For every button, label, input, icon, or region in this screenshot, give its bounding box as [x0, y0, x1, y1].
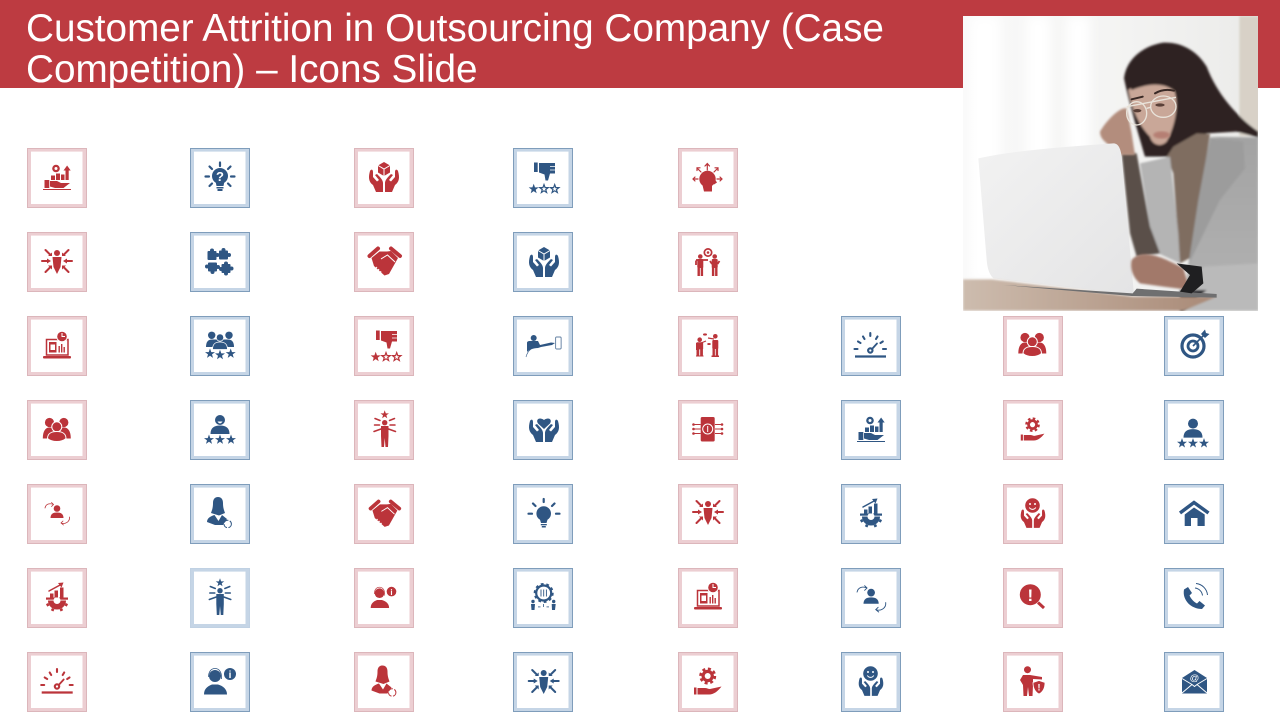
icon tile: handshake	[354, 232, 414, 292]
header bar with title	[0, 0, 1280, 88]
photo: woman working at a laptop	[963, 16, 1258, 311]
icon tile: phone call	[1164, 568, 1224, 628]
icon tile: gauge	[842, 316, 900, 376]
icon tile: growth in hand	[28, 148, 86, 208]
lower sleeve	[1183, 263, 1258, 311]
icon tile: hands with box	[354, 148, 414, 208]
icon tile: puzzle pieces	[190, 232, 250, 292]
icon tile: person pointing to phone	[514, 316, 572, 376]
icon tile: gear in hand	[678, 652, 738, 712]
icon tile: magnifier with alert: !	[1027, 586, 1033, 605]
icon tile: person swap arrows	[28, 484, 86, 544]
icon tile: man with shield: !	[1038, 682, 1040, 692]
row 3	[28, 316, 1224, 376]
icon tile: bulb with question mark	[190, 148, 250, 208]
title	[26, 7, 884, 88]
row 7	[28, 652, 1224, 712]
icon tile: target with arrow	[1164, 316, 1224, 376]
icon tile: chart over gear	[842, 484, 900, 544]
icon tile: hands with heart	[514, 400, 572, 460]
icon tile: person with inward arrows	[28, 232, 86, 292]
table	[963, 279, 1217, 311]
icon tile: smiling person with three stars	[190, 400, 250, 460]
row 5	[28, 484, 1224, 544]
icon tile: handshake	[354, 484, 414, 544]
icon tile: phone with circuit lines	[678, 400, 738, 460]
face	[1128, 78, 1176, 145]
icon tile: gear with two people	[514, 568, 572, 628]
laptop lid	[978, 143, 1134, 295]
raised hand	[1100, 108, 1135, 155]
title: Customer Attrition in Outsourcing Company (Case	[26, 7, 884, 50]
icon tile: woman with sync symbol	[354, 652, 414, 712]
icon tile: gauge	[28, 652, 86, 712]
icon tile: group of people	[1004, 316, 1062, 376]
icon tile: agent with info bubble	[354, 568, 414, 628]
icon tile: agent with info bubble: i	[229, 670, 232, 681]
icon tile: man with star	[190, 568, 250, 628]
icon tile: two people with coin	[678, 232, 738, 292]
icon tile: email envelope: @	[1190, 673, 1199, 684]
icon tile: hands with smiley	[1004, 484, 1062, 544]
icon tile: bulb with question mark: ?	[216, 169, 224, 184]
icon tile: man with shield	[1004, 652, 1062, 712]
icon tile: hands with box	[514, 232, 572, 292]
icon tile: magnifier with alert	[1004, 568, 1062, 628]
icon tile: light bulb	[514, 484, 572, 544]
icon tile: hands with smiley	[842, 652, 900, 712]
icon tile: chart over gear	[28, 568, 86, 628]
eyes and brows	[1132, 90, 1174, 99]
icon tile: thumbs down with stars	[354, 316, 414, 376]
icon tile: man with star	[354, 400, 414, 460]
icon tile: agent with info bubble	[190, 652, 250, 712]
icon tile: woman with sync symbol	[190, 484, 250, 544]
glasses	[1127, 96, 1176, 125]
row 2	[28, 232, 738, 292]
icon tile: house	[1164, 484, 1224, 544]
row 4	[28, 400, 1224, 460]
icon tile: growth in hand	[842, 400, 900, 460]
row 6	[28, 568, 1224, 628]
icon tile: two people with eye symbols	[678, 316, 738, 376]
icon tile: laptop with clock	[678, 568, 738, 628]
icon tile: person with inward arrows	[678, 484, 738, 544]
blazer	[1183, 137, 1258, 311]
icon tile: email envelope	[1164, 652, 1224, 712]
icon tile: thumbs down with stars	[514, 148, 572, 208]
hair back	[1124, 43, 1258, 157]
icon tile: agent with info bubble: i	[390, 588, 393, 597]
icon tile: head with arrows	[678, 148, 738, 208]
icon tile: team with stars	[190, 316, 250, 376]
icon tile: person with inward arrows	[514, 652, 572, 712]
icon tile: gear in hand	[1004, 400, 1062, 460]
icon tile: group of people	[28, 400, 86, 460]
typing hand and watch	[1131, 254, 1190, 290]
icon tile: person swap arrows	[842, 568, 900, 628]
icon tile: person with three stars	[1164, 400, 1224, 460]
icon tile: laptop with clock	[28, 316, 86, 376]
row 1	[28, 148, 738, 208]
neck and sweater	[1167, 133, 1210, 263]
